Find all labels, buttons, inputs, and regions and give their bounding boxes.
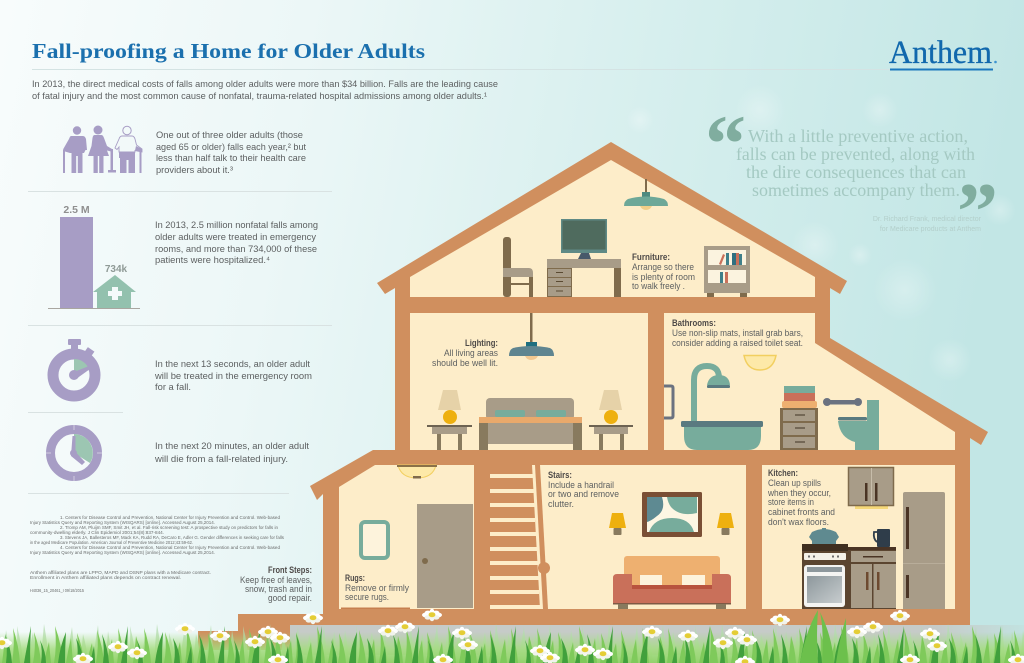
icon: chair: [503, 237, 533, 297]
text: kitchen: when they occur,: [767, 488, 831, 498]
text: furniture: Furniture:: [632, 252, 670, 262]
text: rugs: [345, 573, 409, 602]
icon: older adults: [63, 126, 142, 173]
bar chart: falls treated vs hospitalized: 2.5 M: [63, 204, 90, 216]
icon: refrigerator: [903, 492, 945, 609]
icon: shower and tub: [681, 366, 763, 450]
text: stairs: [548, 470, 619, 509]
footnotes: in the aged Medicare Population. American Journal of Preventive Medicine 2012;43:59-62.: [30, 540, 193, 545]
stat: 13 seconds: In the next 13 seconds, an older adult: [155, 359, 310, 370]
icon: towels and cabinet: [780, 386, 818, 450]
text: bathrooms: [672, 318, 803, 348]
panel: kitchen: [762, 465, 955, 609]
text: kitchen: store items in: [768, 497, 814, 507]
text: rugs: secure rugs.: [345, 592, 389, 602]
text: front steps: good repair.: [268, 593, 312, 603]
icon: kettle: [874, 529, 890, 547]
quote: falls can be prevented, along with: [736, 144, 975, 164]
icon: clock: [46, 425, 102, 481]
text: kitchen: cabinet fronts and: [768, 507, 835, 517]
rug: [341, 608, 410, 609]
text: stairs: or two and remove: [548, 489, 619, 499]
grass: [0, 610, 1024, 663]
bar chart: falls treated vs hospitalized: [48, 204, 140, 309]
text: furniture: to walk freely .: [632, 281, 685, 291]
text: stairs: Include a handrail: [548, 480, 614, 490]
icon: ceiling lamp: [509, 313, 554, 360]
stairs: [490, 465, 543, 609]
stat: 2.5 million: In 2013, 2.5 million nonfatal falls among: [155, 220, 318, 231]
text: rugs: Remove or firmly: [345, 583, 409, 593]
icon: ceiling light: [397, 465, 437, 478]
text: front steps: Keep free of leaves,: [240, 575, 312, 585]
panel: entry room: [339, 465, 474, 609]
handrail knob: [538, 562, 550, 574]
footnotes: 1. Centers for Disease Control and Prevention, National Center for Injury Prevention and Control. Web-based: [60, 515, 281, 520]
stat: 2.5 million: [155, 220, 318, 266]
icon: sofa: [613, 556, 731, 609]
text: kitchen: Kitchen:: [768, 468, 798, 478]
text: bathrooms: Bathrooms:: [672, 318, 716, 328]
walkway: grey slab: [290, 625, 1024, 655]
stat: 20 minutes: In the next 20 minutes, an older adult: [155, 441, 309, 452]
icon: upper cabinet: [848, 468, 894, 509]
icon: desk: [547, 259, 621, 297]
icon: door: [417, 504, 473, 608]
text: lighting: [432, 338, 498, 368]
icon: window: [361, 522, 388, 558]
panel: living room: [538, 465, 746, 609]
quote: sometimes accompany them.: [752, 180, 960, 200]
stat: 13 seconds: [154, 359, 312, 393]
quote: [705, 98, 998, 257]
title: Fall-proofing a Home for Older Adults: [32, 39, 425, 63]
house structure: [310, 142, 988, 625]
header rule: [32, 69, 890, 70]
quote: the dire consequences that can: [746, 162, 966, 182]
stat: 20 minutes: will die from a fall-related injury.: [154, 454, 288, 465]
quote: ”: [957, 166, 998, 257]
icon: stove and pot: [802, 528, 848, 609]
stat: 13 seconds: will be treated in the emergency room: [154, 371, 312, 382]
text: furniture: is plenty of room: [632, 272, 695, 282]
intro text: of fatal injury and the most common cause of nonfatal, trauma-related hospital admissions among older adults.¹: [32, 91, 487, 102]
icon: lower cabinet: [848, 547, 896, 609]
text: kitchen: don't wax floors.: [768, 517, 829, 527]
text: front steps: [240, 565, 312, 603]
icon: right table lamp: [589, 390, 633, 450]
footnotes: [30, 515, 284, 593]
text: stairs: Stairs:: [548, 470, 572, 480]
text: front steps: snow, trash and in: [245, 584, 312, 594]
text: lighting: All living areas: [444, 348, 498, 358]
stat: 2.5 million: patients were hospitalized.⁴: [155, 255, 270, 266]
icon: bed: [479, 398, 582, 450]
panel: attic room: [410, 160, 815, 297]
footnotes: 4. Centers for Disease Control and Prevention, National Center for Injury Prevention and Control. Web-based: [60, 545, 281, 550]
stat: one in three: providers about it.³: [156, 165, 233, 176]
panel: bathroom: [664, 313, 955, 450]
stat: 13 seconds: for a fall.: [155, 382, 191, 393]
footnotes: H4036_15_20461_I 09/18/2015: [30, 588, 85, 593]
text: furniture: [632, 252, 695, 291]
quote attribution: for Medicare products at Anthem: [880, 226, 981, 233]
stat: one in three: One out of three older adults (those: [156, 130, 303, 141]
footnotes: Injury Statistics Query and Reporting System (WISQARS) [online]. Accessed August 25,2014.: [30, 550, 215, 555]
icon: attic lamp: [624, 179, 668, 210]
stat: one in three: [156, 130, 306, 176]
icon: wall light: [744, 356, 776, 370]
icon: grab bar: [823, 398, 862, 406]
footnotes: 2. Tromp AM, Pluijm SMF, Smit JH, et al. Fall-risk screening test: A prospective study on predictors for falls in: [60, 525, 279, 530]
stat: one in three: aged 65 or older) falls each year,² but: [156, 142, 306, 153]
logo: Anthem: Anthem: [889, 35, 992, 71]
text: bathrooms: consider adding a raised toilet seat.: [672, 338, 803, 348]
stat: 20 minutes: [154, 441, 309, 465]
text: lighting: Lighting:: [465, 338, 498, 348]
panel: bedroom / lighting: [410, 313, 648, 450]
bar chart: falls treated vs hospitalized: 734k: [105, 264, 128, 275]
icon: framed picture: [642, 492, 702, 537]
stat: one in three: less than half talk to their health care: [156, 153, 306, 164]
icon: right sconce: [717, 513, 734, 535]
text: rugs: Rugs:: [345, 573, 365, 583]
quote attribution: Dr. Richard Frank, medical director: [873, 216, 982, 223]
icon: toilet: [838, 400, 879, 450]
footnotes: Anthem affiliated plans are LPPO, MAPD and DSNP plans with a Medicare contract.: [30, 570, 211, 575]
text: stairs: clutter.: [548, 499, 574, 509]
footnotes: Enrollment in Anthem affiliated plans depends on contract renewal.: [30, 575, 181, 580]
quote: With a little preventive action,: [748, 126, 968, 146]
text: bathrooms: Use non-slip mats, install grab bars,: [672, 328, 803, 338]
text: kitchen: Clean up spills: [768, 478, 821, 488]
front steps: orange: [198, 614, 340, 650]
icon: stopwatch: [53, 339, 95, 396]
text: front steps: Front Steps:: [268, 565, 312, 575]
daisies: [0, 609, 1024, 663]
icon: computer monitor: [561, 219, 607, 259]
text: lighting: should be well lit.: [432, 358, 498, 368]
intro text: [32, 79, 498, 102]
text: kitchen: [767, 468, 835, 527]
footnotes: community-dwelling elderly. J Clin Epidemiol 2001;54(8):837-844.: [30, 530, 164, 535]
icon: left sconce: [609, 513, 626, 535]
quote attribution: [873, 216, 982, 233]
footnotes: Injury Statistics Query and Reporting System (WISQARS) [online]. Accessed August 25,2014.: [30, 520, 215, 525]
text: furniture: Arrange so there: [632, 262, 694, 272]
stat: 2.5 million: rooms, and more than 734,000 of these: [155, 244, 317, 255]
icon: bookshelf: [704, 246, 750, 297]
icon: towel bar: [664, 386, 673, 418]
intro text: In 2013, the direct medical costs of falls among older adults were more than $34 billion. Falls are the leading cause: [32, 79, 498, 90]
taller central tuft: [800, 610, 848, 663]
icon: left table lamp: [427, 390, 472, 450]
footnotes: 3. Stevens JA, Ballesteros MF, Mack KA, Rudd RA, DeCaro E, Adler G. Gender differences in seeking care for falls: [60, 535, 284, 540]
quote: “: [705, 98, 746, 189]
stat: 2.5 million: older adults were treated in emergency: [155, 232, 316, 243]
